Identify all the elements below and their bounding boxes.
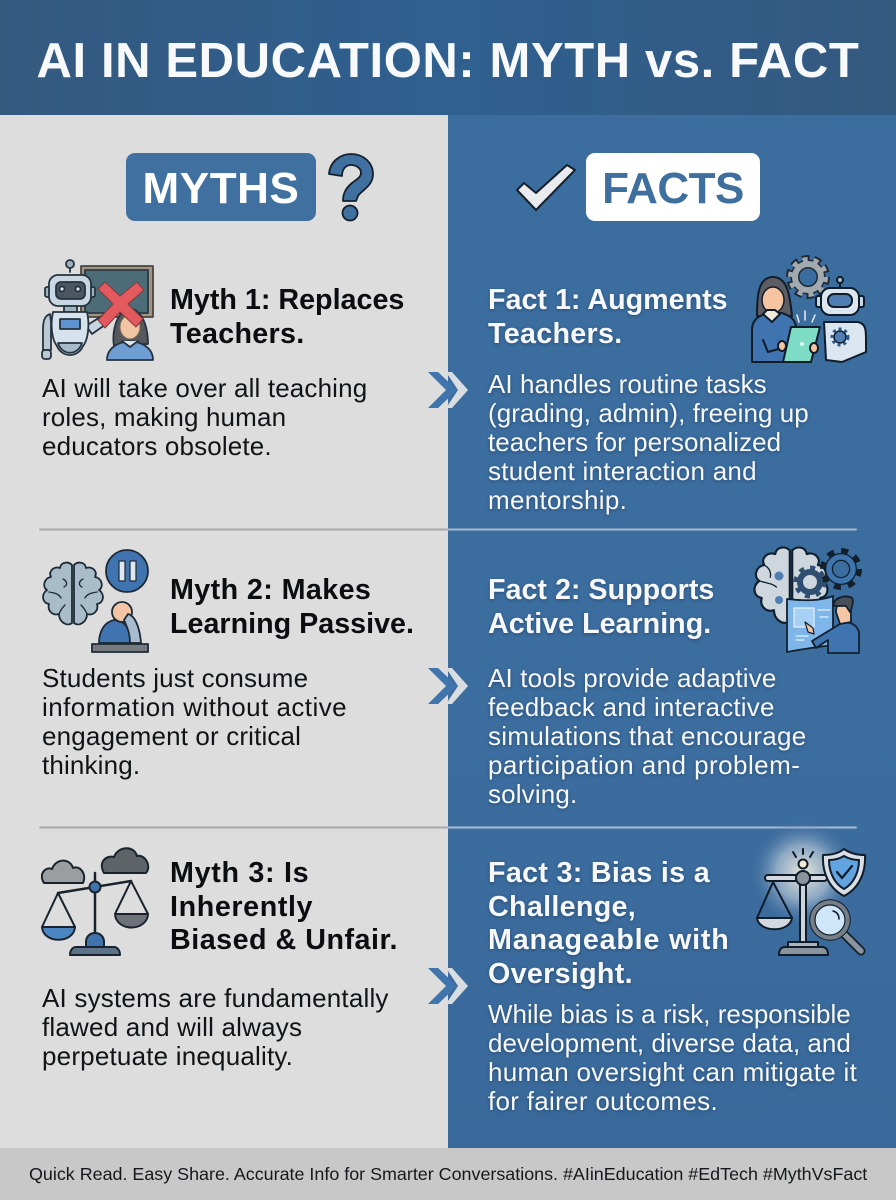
myth 3 heading <box>170 857 398 956</box>
title: AI IN EDUCATION: MYTH vs. FACT <box>37 34 859 88</box>
icon: robot and crossed-out teacher <box>42 260 153 360</box>
fact 2 text: simulations that encourage <box>488 721 807 751</box>
myth 2 heading: Learning Passive. <box>170 608 414 640</box>
fact 3 heading <box>488 857 730 992</box>
fact 1 text: mentorship. <box>488 485 627 515</box>
fact 1 heading: Fact 1: Augments <box>488 284 728 316</box>
icon: scales with shield and magnifier <box>749 819 865 955</box>
heading badge: facts <box>586 153 760 221</box>
myth 1 text: educators obsolete. <box>42 431 272 461</box>
fact 3 text: development, diverse data, and <box>488 1028 851 1058</box>
fact 1 heading: Teachers. <box>488 318 623 350</box>
arrow: myth 1 to fact 1 <box>428 372 468 408</box>
myth 1 text: roles, making human <box>42 402 286 432</box>
fact 1 text: AI handles routine tasks <box>488 369 767 399</box>
fact 1 text: (grading, admin), freeing up <box>488 398 809 428</box>
panel: myths background <box>0 115 448 1148</box>
fact 1 heading <box>487 284 728 350</box>
fact 2 text: solving. <box>488 779 577 809</box>
fact 3 heading: Fact 3: Bias is a <box>488 857 710 889</box>
fact 1 text <box>488 369 809 516</box>
myth 1 text: AI will take over all teaching <box>42 373 367 403</box>
fact 2 text: feedback and interactive <box>488 692 775 722</box>
icon: brain with gears and interactive screen <box>754 547 859 653</box>
myth 3 text <box>42 983 389 1071</box>
myth 3 text: AI systems are fundamentally <box>42 983 389 1013</box>
myth 1 heading: Myth 1: Replaces <box>170 284 404 316</box>
myth 2 heading: Myth 2: Makes <box>170 574 371 606</box>
title banner <box>0 0 896 115</box>
fact 1 text: teachers for personalized <box>488 427 781 457</box>
icon: unbalanced scales with clouds <box>42 848 148 955</box>
fact 2 text <box>488 663 807 811</box>
myth 2 text: engagement or critical <box>42 721 301 751</box>
myth 2 heading <box>170 574 414 640</box>
fact 3 text: While bias is a risk, responsible <box>488 999 851 1029</box>
heading badge: myths: MYTHS <box>142 164 300 213</box>
icon: brain with pause symbol and bored student <box>43 550 148 652</box>
myth 3 heading: Inherently <box>170 891 313 923</box>
divider lines <box>40 530 856 828</box>
arrow: myth 3 to fact 3 <box>428 968 468 1004</box>
footer bar <box>0 1148 896 1200</box>
icon: check mark <box>517 165 575 210</box>
heading badge: myths <box>126 153 316 221</box>
fact 3 text: human oversight can mitigate it <box>488 1057 857 1087</box>
myth 2 text: Students just consume <box>42 663 308 693</box>
myth 1 heading: Teachers. <box>170 318 305 350</box>
myth 2 text: information without active <box>42 692 347 722</box>
myth 2 text <box>42 663 347 780</box>
myth 3 text: flawed and will always <box>42 1012 302 1042</box>
fact 2 heading: Active Learning. <box>488 608 711 640</box>
myth 3 heading: Myth 3: Is <box>170 857 309 889</box>
heading badge: facts: FACTS <box>602 164 744 213</box>
glow behind scales <box>749 819 857 927</box>
panel: facts background <box>448 115 896 1148</box>
fact 2 text: AI tools provide adaptive <box>488 663 776 693</box>
fact 3 heading: Manageable with <box>488 924 730 956</box>
fact 3 text <box>488 999 857 1116</box>
fact 2 heading <box>488 574 714 642</box>
fact 3 heading: Oversight. <box>488 958 633 990</box>
fact 2 text: participation and problem- <box>488 750 800 780</box>
fact 1 text: student interaction and <box>488 456 757 486</box>
fact 3 heading: Challenge, <box>488 891 636 923</box>
footer text: Quick Read. Easy Share. Accurate Info for Smarter Conversations. #AIinEducation #EdTech #MythVsFact <box>29 1164 867 1184</box>
myth 1 heading <box>170 284 404 350</box>
icon: question mark <box>329 154 373 220</box>
myth 3 heading: Biased & Unfair. <box>170 924 398 956</box>
icon: teacher and robot with tablet <box>752 259 866 362</box>
myth 3 text: perpetuate inequality. <box>42 1041 293 1071</box>
fact 2 heading: Fact 2: Supports <box>488 574 714 606</box>
fact 3 text: for fairer outcomes. <box>488 1086 718 1116</box>
myth 2 text: thinking. <box>42 750 140 780</box>
arrow: myth 2 to fact 2 <box>428 668 468 704</box>
myth 1 text <box>42 373 367 461</box>
